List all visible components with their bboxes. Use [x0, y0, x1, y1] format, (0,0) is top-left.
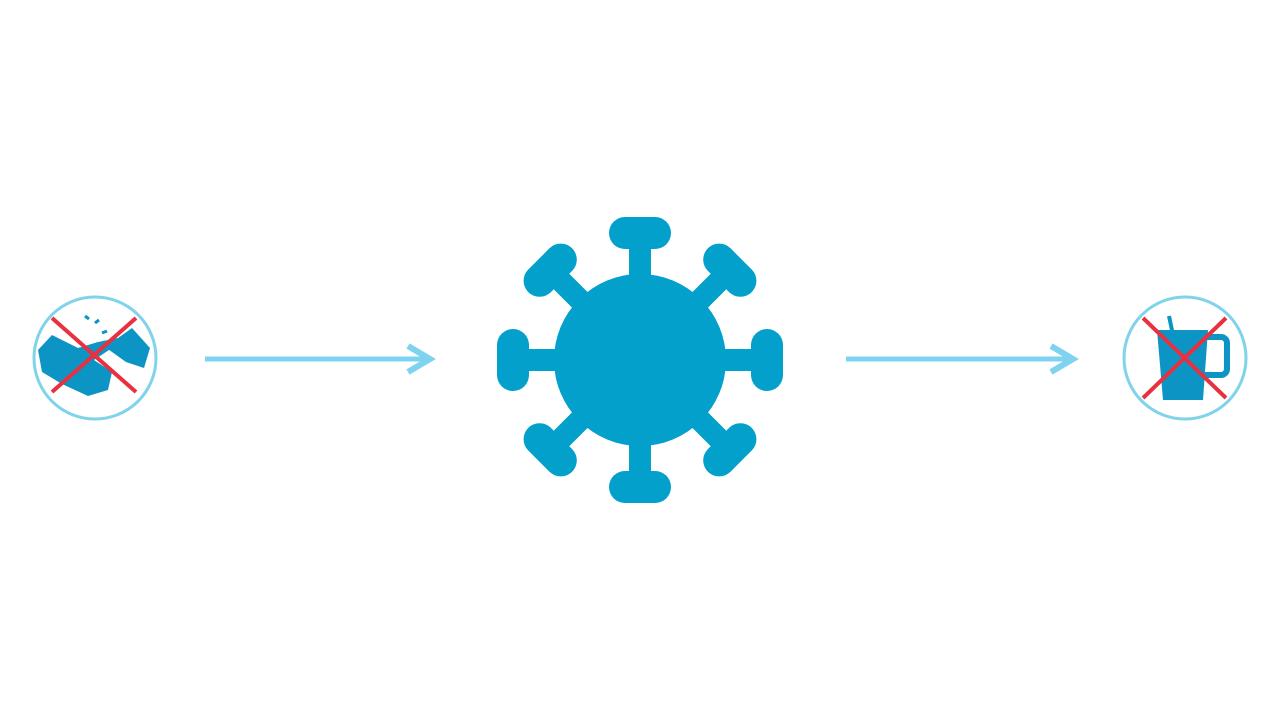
- arrow: right: [846, 346, 1073, 372]
- icon: no handshake: [34, 297, 156, 419]
- icon: virus: [497, 217, 783, 503]
- arrow: left: [205, 346, 430, 372]
- icon: no shared cup: [1124, 297, 1246, 419]
